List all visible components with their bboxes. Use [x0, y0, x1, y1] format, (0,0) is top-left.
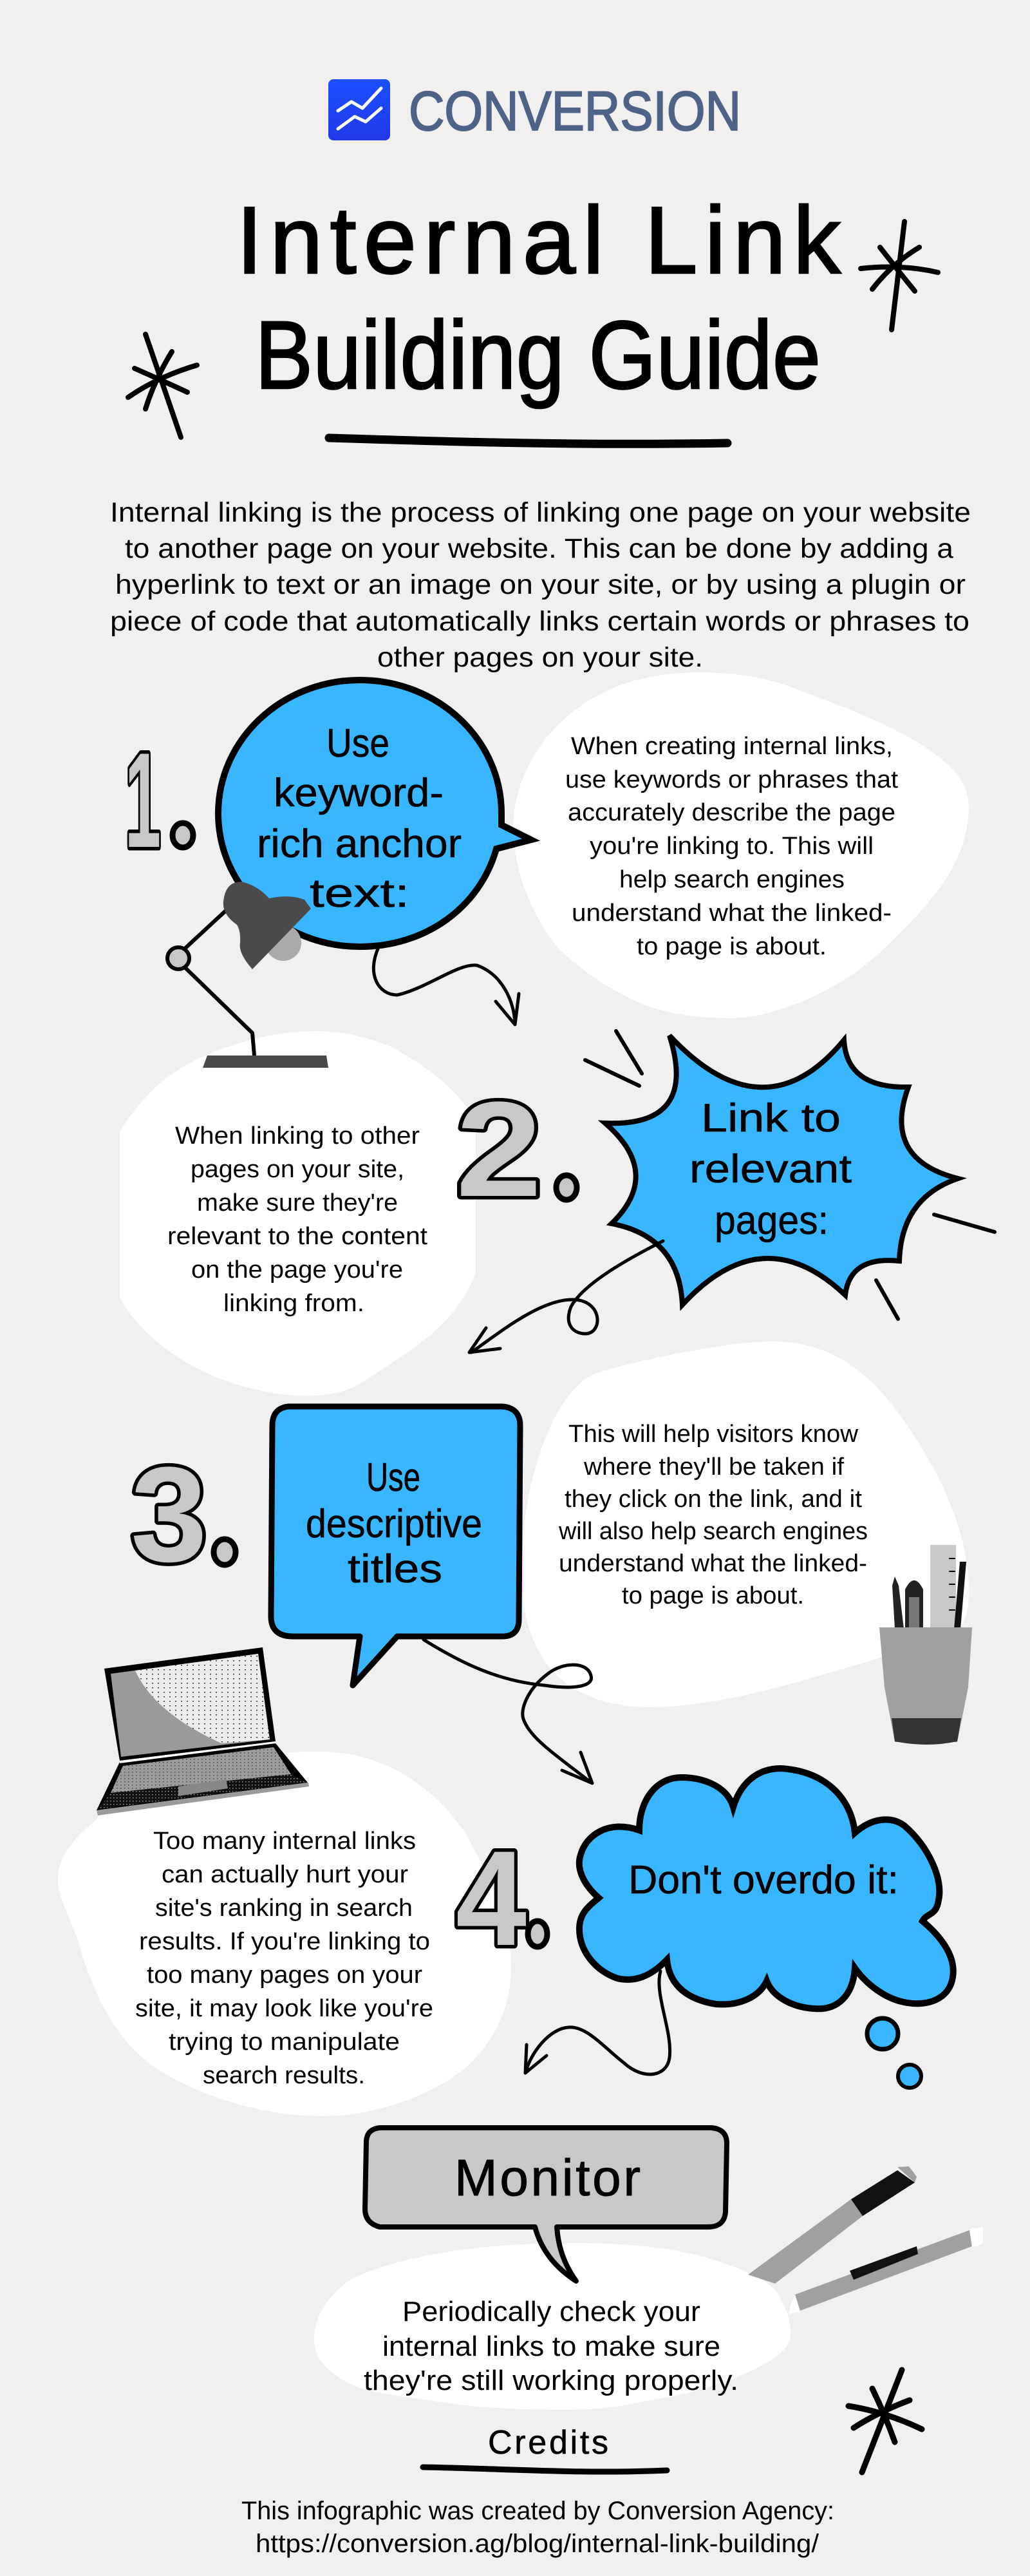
- thought bubbles: [867, 2018, 921, 2088]
- panel: tip 4 description: site, it may look like you're: [135, 1995, 433, 2022]
- title: [236, 187, 841, 444]
- starburst: link to relevant pages: relevant: [689, 1147, 852, 1191]
- panel: tip 2 description: relevant to the content: [167, 1223, 427, 1250]
- speech box: use descriptive titles: Use: [366, 1455, 420, 1500]
- panel: tip 1 description: When creating internal links,: [571, 733, 893, 760]
- icon: star bottom right: [848, 2370, 922, 2472]
- panel: tip 2 description: When linking to other: [175, 1122, 420, 1150]
- panel: tip 1 description: you're linking to. This will: [590, 833, 874, 860]
- panel: tip 3 description: understand what the linked-: [559, 1550, 867, 1577]
- icon: pencil cup: [879, 1545, 972, 1745]
- panel: tip 3 description: to page is about.: [622, 1582, 804, 1609]
- intro text: piece of code that automatically links certain words or phrases to: [110, 606, 969, 637]
- intro text: hyperlink to text or an image on your site, or by using a plugin or: [115, 569, 966, 600]
- panel: tip 3 description: will also help search engines: [558, 1518, 868, 1545]
- panel: tip 2 description: [120, 1031, 476, 1396]
- panel: monitor description: [314, 2243, 791, 2410]
- panel: tip 4 description: search results.: [203, 2062, 365, 2089]
- title: Building Guide: [255, 301, 821, 409]
- panel: tip 4 description: too many pages on your: [147, 1962, 422, 1989]
- number 3: 3: [131, 1439, 207, 1590]
- speech bubble: keyword-rich anchor text: keyword-: [274, 771, 444, 815]
- panel: tip 3 description: [523, 1341, 969, 1707]
- speech bubble: keyword-rich anchor text: text:: [310, 871, 409, 916]
- thought cloud: don't overdo it: [579, 1768, 953, 2009]
- starburst: link to relevant pages: [605, 1036, 958, 1305]
- arrow: step 2 to step 3: [469, 1241, 663, 1352]
- icon: pens: [748, 2166, 983, 2314]
- panel: tip 1 description: [513, 672, 969, 1018]
- panel: tip 1 description: understand what the linked-: [572, 900, 892, 927]
- panel: tip 1 description: help search engines: [619, 866, 845, 893]
- speech bubble: keyword-rich anchor text: Use: [326, 721, 389, 766]
- burst accent dashes: [585, 1031, 995, 1319]
- intro text: Internal linking is the process of linking one page on your website: [110, 497, 971, 528]
- icon: laptop: [97, 1647, 309, 1815]
- speech box: monitor: Monitor: [454, 2149, 641, 2206]
- title: Internal Link: [236, 187, 841, 294]
- credits heading: Credits: [488, 2424, 608, 2461]
- intro text: other pages on your site.: [377, 642, 703, 673]
- number 1: 1: [125, 724, 161, 876]
- credits heading: [423, 2424, 667, 2472]
- panel: tip 4 description: Too many internal links: [153, 1828, 416, 1855]
- number 2: 2: [456, 1074, 542, 1225]
- speech box: use descriptive titles: descriptive: [306, 1502, 482, 1546]
- panel: tip 4 description: trying to manipulate: [169, 2029, 400, 2056]
- speech box: monitor: [365, 2128, 727, 2281]
- icon: star left of title: [128, 334, 197, 437]
- panel: tip 1 description: to page is about.: [637, 933, 827, 960]
- icon: star right of title: [861, 222, 938, 330]
- icon: desk lamp: [167, 882, 328, 1068]
- panel: monitor description: Periodically check your: [402, 2296, 700, 2327]
- arrow: step 3 to step 4: [424, 1640, 592, 1783]
- panel: tip 4 description: [58, 1752, 511, 2116]
- panel: tip 2 description: make sure they're: [197, 1189, 398, 1217]
- speech box: use descriptive titles: [271, 1406, 520, 1685]
- credits text: https://conversion.ag/blog/internal-link-building/: [256, 2530, 819, 2558]
- panel: tip 1 description: use keywords or phrases that: [565, 766, 898, 793]
- intro text: to another page on your website. This can be done by adding a: [125, 533, 953, 564]
- thought cloud: don't overdo it: Don't overdo it:: [628, 1858, 899, 1902]
- speech bubble: keyword-rich anchor text: [218, 680, 531, 947]
- panel: tip 3 description: where they'll be taken if: [583, 1454, 844, 1481]
- arrow: step 1 to step 2: [373, 947, 519, 1025]
- logo: CONVERSION: [409, 80, 741, 142]
- panel: tip 4 description: site's ranking in search: [155, 1895, 413, 1922]
- credits text: [241, 2497, 834, 2558]
- panel: tip 1 description: accurately describe the page: [568, 799, 895, 826]
- speech box: use descriptive titles: titles: [348, 1547, 442, 1591]
- panel: monitor description: they're still working properly.: [364, 2365, 738, 2396]
- number 4: 4: [456, 1823, 527, 1974]
- starburst: link to relevant pages: Link to: [701, 1096, 841, 1141]
- credits text: This infographic was created by Conversion Agency:: [241, 2497, 834, 2525]
- panel: tip 2 description: linking from.: [223, 1290, 364, 1317]
- starburst: link to relevant pages: pages:: [715, 1198, 829, 1243]
- panel: tip 4 description: results. If you're linking to: [139, 1928, 430, 1955]
- panel: tip 3 description: they click on the link, and it: [565, 1486, 862, 1513]
- panel: monitor description: internal links to make sure: [382, 2331, 720, 2362]
- panel: tip 4 description: can actually hurt your: [162, 1861, 408, 1888]
- speech bubble: keyword-rich anchor text: rich anchor: [257, 822, 462, 866]
- number 2: [456, 1074, 577, 1225]
- intro text: [110, 497, 971, 673]
- panel: tip 3 description: This will help visitors know: [568, 1421, 859, 1448]
- panel: tip 2 description: pages on your site,: [191, 1156, 404, 1183]
- arrow: step 4 to monitor: [525, 1971, 670, 2074]
- panel: tip 2 description: on the page you're: [191, 1256, 403, 1283]
